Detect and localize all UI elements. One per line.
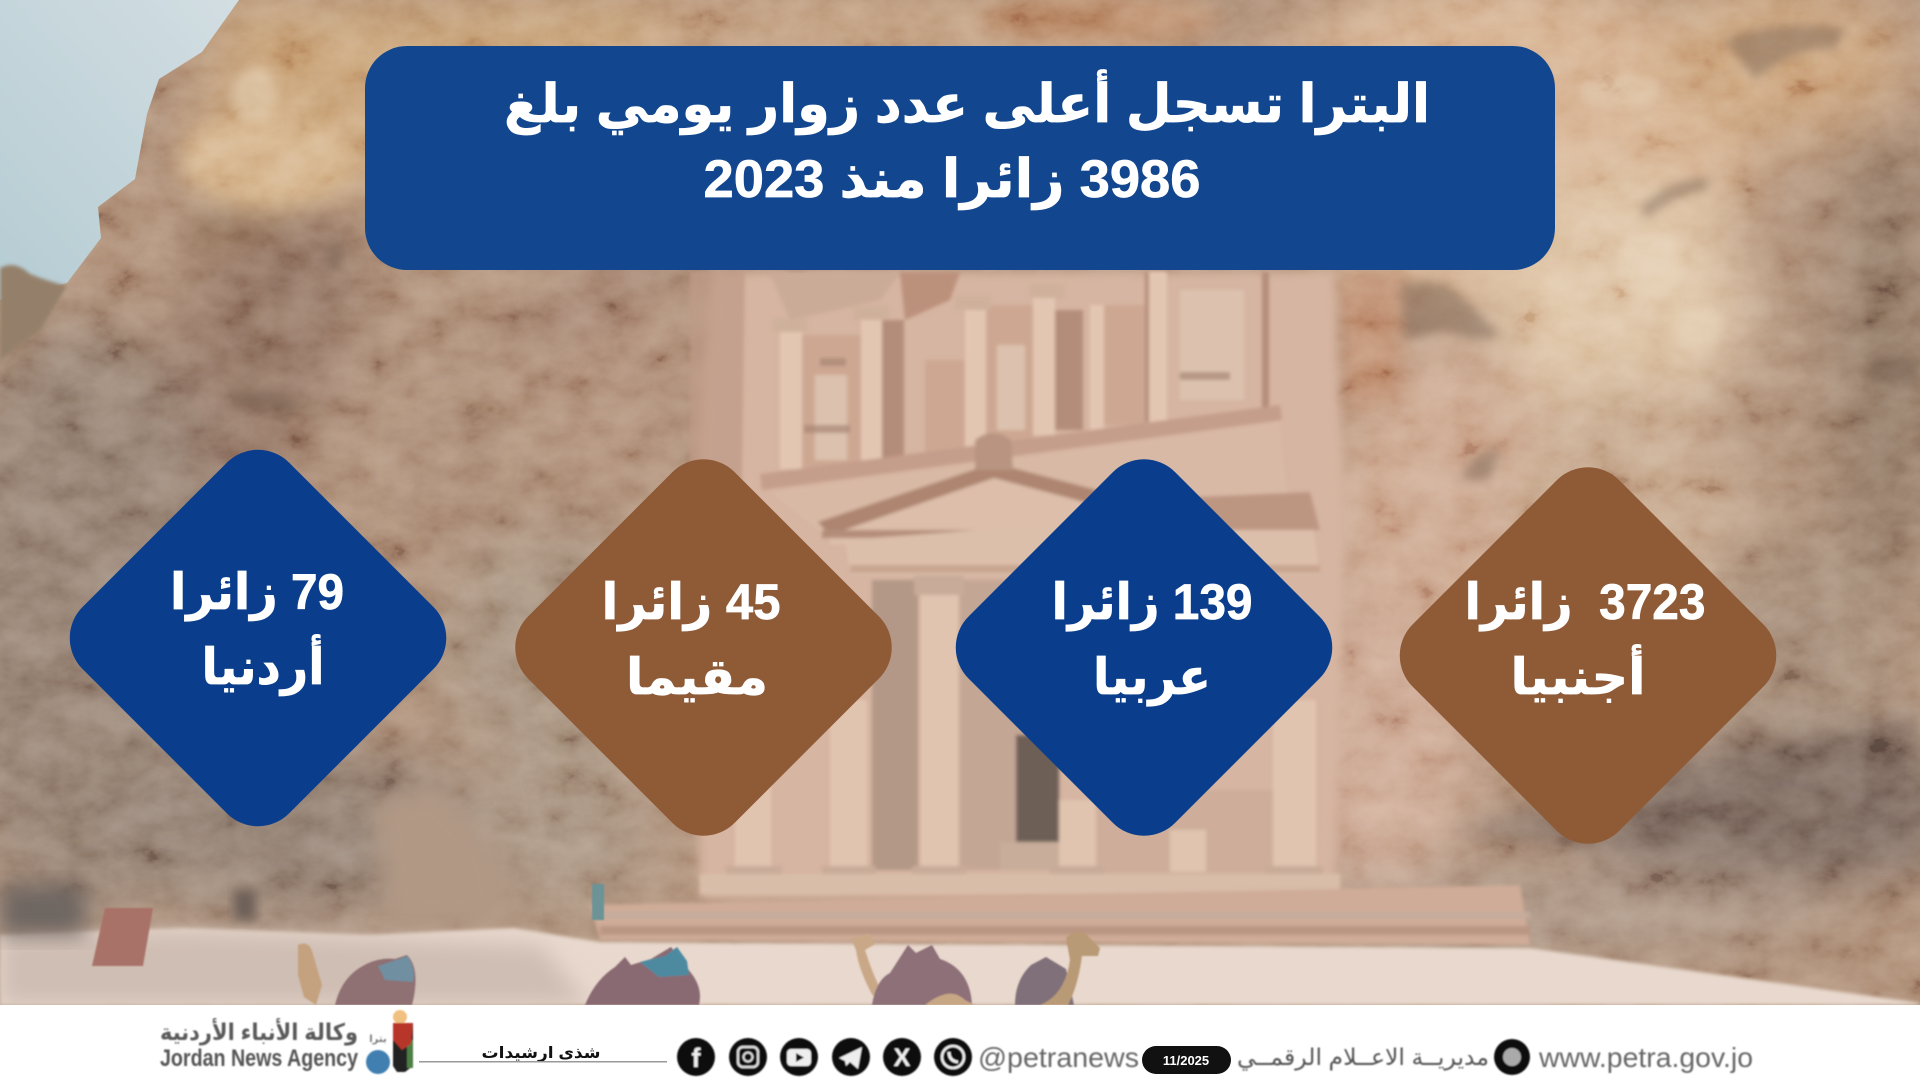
agency name english: Jordan News Agency <box>160 1045 359 1072</box>
label: Jordanian: أردنيا <box>202 634 324 696</box>
diamond: resident visitors <box>497 441 910 854</box>
footer bar <box>0 1005 1920 1080</box>
upper columns <box>780 272 1167 469</box>
upper entablature <box>760 405 1282 490</box>
light patches in rock <box>233 67 1724 352</box>
lower columns <box>735 580 1316 872</box>
title text line 2: 3986 زائرا منذ 2023 <box>704 150 1200 210</box>
icon: agency logo <box>366 1010 413 1074</box>
lower entablature <box>845 505 1320 575</box>
icon: facebook <box>677 1038 715 1076</box>
label: foreign: أجنبيا <box>1510 644 1646 705</box>
social icons <box>677 1038 972 1076</box>
pediment <box>818 463 1180 535</box>
diamond: Arab visitors <box>938 441 1350 854</box>
value: 45 visitors: 45 زائرا <box>602 574 780 632</box>
capitals <box>773 284 1064 332</box>
value: 79 visitors: 79 زائرا <box>170 564 344 622</box>
icon: agency logo: بترا <box>369 1034 387 1045</box>
agency name <box>160 1017 359 1072</box>
camels <box>298 932 1100 1005</box>
steps of facade <box>700 874 1340 894</box>
icon: instagram <box>729 1038 767 1076</box>
icon: X: X <box>894 1044 911 1072</box>
author name: شذى ارشيدات <box>482 1045 600 1062</box>
terrace and steps <box>590 885 1530 945</box>
date pill: 11/2025 <box>1163 1053 1209 1068</box>
author underline <box>419 1061 667 1062</box>
camel 1 <box>298 943 416 1005</box>
value: 3723 visitors: 3723 زائرا <box>1464 574 1706 632</box>
diamond: Jordanian visitors <box>52 432 464 844</box>
agency name arabic: وكالة الأنباء الأردنية <box>160 1017 358 1046</box>
cave door <box>234 890 256 920</box>
lower left boulder <box>372 785 510 930</box>
handle: @petranews <box>978 1042 1139 1073</box>
icon: facebook: f <box>692 1043 702 1073</box>
icon: youtube <box>780 1038 818 1076</box>
treasury facade <box>690 272 1345 900</box>
distant bush <box>0 265 67 360</box>
label: resident: مقيما <box>626 649 768 705</box>
website: www.petra.gov.jo <box>1538 1042 1753 1073</box>
value: 139 visitors: 139 زائرا <box>1052 574 1252 632</box>
ground <box>0 928 1920 1005</box>
icon: globe <box>1494 1039 1530 1075</box>
label: Arab: عربيا <box>1093 649 1211 707</box>
icon: whatsapp <box>934 1038 972 1076</box>
camel 3 <box>851 934 975 1005</box>
date pill <box>1142 1046 1231 1074</box>
camel 4 <box>1015 932 1100 1005</box>
dark cracks in rock <box>234 22 1920 484</box>
sky <box>0 0 300 330</box>
camel 2 <box>585 947 700 1005</box>
upper recesses <box>802 305 1149 470</box>
diamond: foreign visitors <box>1382 449 1794 862</box>
lone visitor <box>592 884 604 920</box>
title text line 1: البترا تسجل أعلى عدد زوار يومي بلغ <box>504 69 1430 135</box>
icon: X <box>883 1038 921 1076</box>
icon: telegram <box>832 1038 870 1076</box>
red sign <box>92 908 153 966</box>
lower bays <box>872 580 918 870</box>
department name: مديريــة الاعــلام الرقمــي <box>1237 1044 1489 1071</box>
title panel <box>365 46 1555 270</box>
dark crowd at left <box>0 885 85 935</box>
